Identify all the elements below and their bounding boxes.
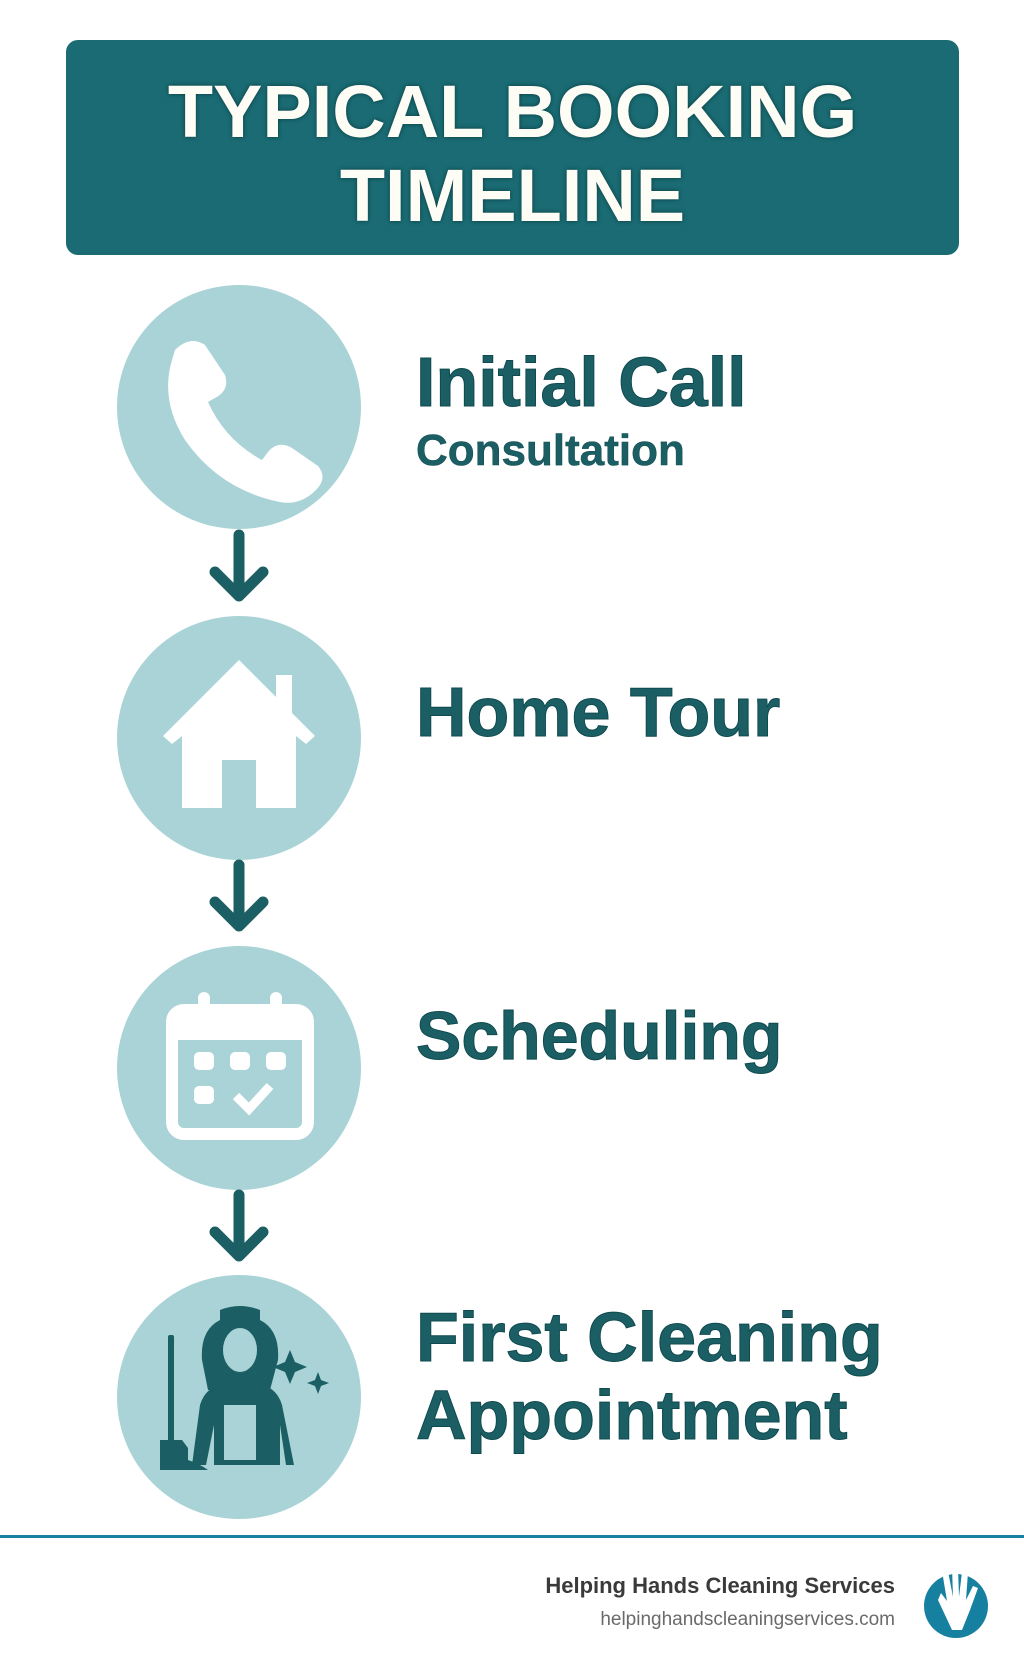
icon: cleaner	[117, 1275, 361, 1519]
icon: house	[117, 616, 361, 860]
arrow 3	[215, 1195, 263, 1256]
icon: phone	[117, 285, 361, 529]
footer text: helpinghandscleaningservices.com	[600, 1609, 895, 1630]
step 4 text: First Cleaning	[416, 1298, 883, 1376]
step 1 text	[416, 343, 747, 475]
step 1 text: Consultation	[416, 426, 685, 475]
arrow 2	[215, 865, 263, 926]
title banner: TYPICAL BOOKING	[168, 70, 857, 153]
footer text: Helping Hands Cleaning Services	[545, 1573, 895, 1598]
title banner	[66, 40, 959, 255]
step 1 text: Initial Call	[416, 343, 747, 421]
step 2 text: Home Tour	[416, 673, 780, 751]
footer divider	[0, 1535, 1024, 1538]
arrow 1	[215, 535, 263, 596]
step 3 text: Scheduling	[416, 998, 782, 1074]
logo	[924, 1574, 988, 1638]
step 4 text	[416, 1298, 883, 1454]
icon: calendar	[117, 946, 361, 1190]
footer text	[545, 1573, 895, 1630]
step 4 text: Appointment	[416, 1376, 848, 1454]
title banner: TIMELINE	[340, 154, 685, 237]
